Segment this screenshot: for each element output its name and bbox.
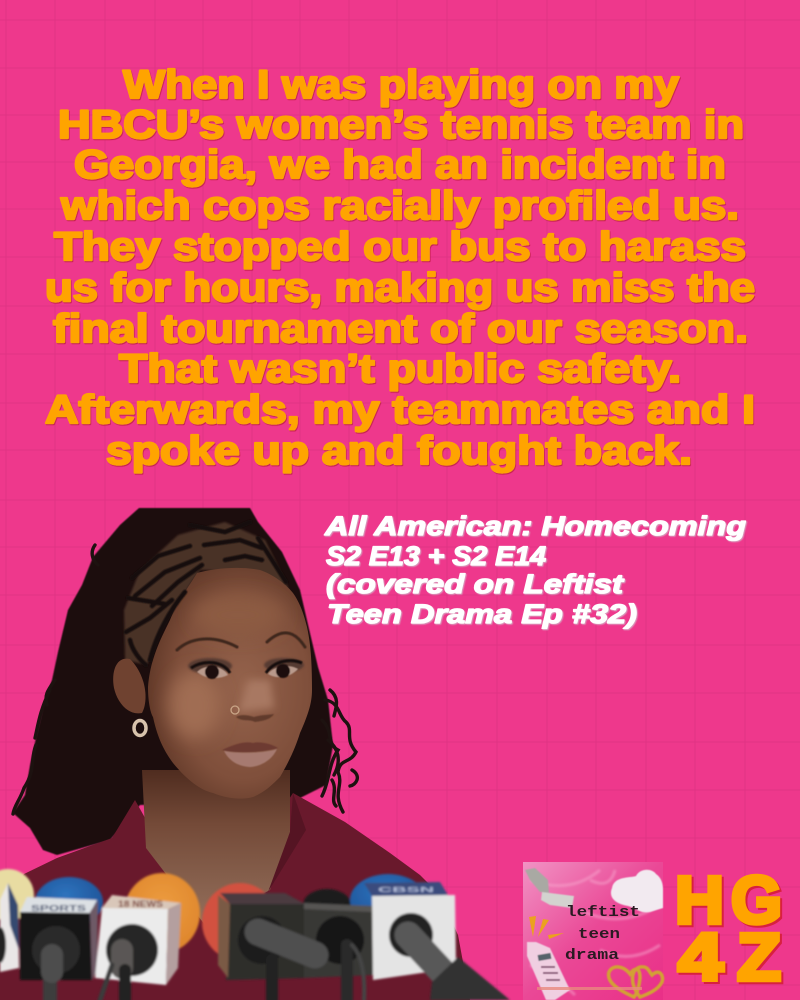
- hair: [13, 508, 333, 855]
- brand mark: HG 4Z: G: [731, 863, 782, 938]
- portrait of the character: [0, 508, 470, 1000]
- quote heading text: us for hours, making us miss the: [45, 266, 755, 310]
- hair curls: [13, 545, 357, 814]
- quote heading text: which cops racially profiled us.: [60, 184, 739, 228]
- retro phone: [527, 942, 570, 1000]
- quote heading text: Afterwards, my teammates and I: [45, 388, 755, 432]
- quote heading text: When I was playing on my: [123, 63, 680, 107]
- logo wordmark: [565, 904, 640, 964]
- quote heading text: [45, 63, 755, 473]
- yellow burst marks: [529, 916, 564, 939]
- scalp between braids: [124, 522, 300, 665]
- foam: blue right: [350, 874, 426, 926]
- quote heading text: final tournament of our season.: [53, 307, 748, 351]
- source caption: Teen Drama Ep #32): [327, 599, 637, 629]
- lips: [222, 742, 278, 767]
- braids: [126, 522, 286, 665]
- shirt: [0, 793, 470, 1000]
- logo wordmark: teen: [578, 926, 620, 943]
- cube: white right: CBSN: [378, 887, 434, 894]
- hand with note: [525, 868, 574, 908]
- tiny logo strip: [537, 987, 642, 990]
- foam: blue left: [35, 877, 103, 927]
- cube: dark centre: [218, 893, 305, 980]
- podcast logo: leftist teen drama: [523, 862, 663, 1000]
- cheek highlight: [169, 671, 221, 739]
- quote heading text: They stopped our bus to harass: [54, 225, 746, 269]
- fabric texture: [530, 870, 660, 995]
- nose ring: [231, 706, 239, 714]
- ear: [113, 659, 146, 713]
- nose: [238, 680, 274, 712]
- quote heading text: HBCU’s women’s tennis team in: [58, 103, 744, 147]
- cube: sports: [20, 897, 98, 980]
- source caption: S2 E13 + S2 E14: [326, 541, 546, 571]
- brand mark: HG 4Z: 4: [678, 920, 723, 995]
- cloud: [611, 870, 663, 912]
- source caption: (covered on Leftist: [326, 569, 624, 599]
- foam: cream: [0, 869, 34, 921]
- gold hearts: [609, 967, 663, 997]
- brand mark: HG 4Z: [675, 863, 782, 995]
- collar shadow: [268, 793, 306, 892]
- cube: white 18: [95, 895, 181, 985]
- neck: [142, 770, 290, 925]
- source caption: [324, 511, 747, 629]
- quote heading text: That wasn’t public safety.: [119, 347, 681, 391]
- cube: sports: SPORTS: [31, 904, 87, 913]
- quote heading text: spoke up and fought back.: [106, 429, 692, 473]
- cube: far left: [0, 883, 19, 972]
- mic handles: [50, 932, 448, 1000]
- quote heading text: Georgia, we had an incident in: [74, 143, 726, 187]
- earring: [134, 720, 146, 736]
- cube: white right: [364, 882, 456, 980]
- face: [148, 568, 312, 799]
- foam: black: [303, 889, 351, 921]
- source caption: All American: Homecoming: [324, 511, 747, 541]
- foam: red: [202, 883, 278, 961]
- cube: white 18: 18 NEWS: [118, 899, 163, 909]
- eye shadow: [188, 658, 304, 674]
- eyebrows: [177, 633, 305, 650]
- logo wordmark: leftist: [566, 904, 640, 921]
- cube: dark right: [304, 903, 373, 978]
- brand mark: HG 4Z: Z: [737, 920, 781, 995]
- press microphones: [0, 869, 510, 1000]
- brand mark: HG 4Z: H: [675, 863, 724, 938]
- eyes: [191, 661, 302, 679]
- foam: orange: [124, 873, 200, 953]
- forehead highlight: [193, 595, 283, 635]
- logo wordmark: drama: [565, 947, 619, 964]
- large foreground mic: [430, 957, 510, 1000]
